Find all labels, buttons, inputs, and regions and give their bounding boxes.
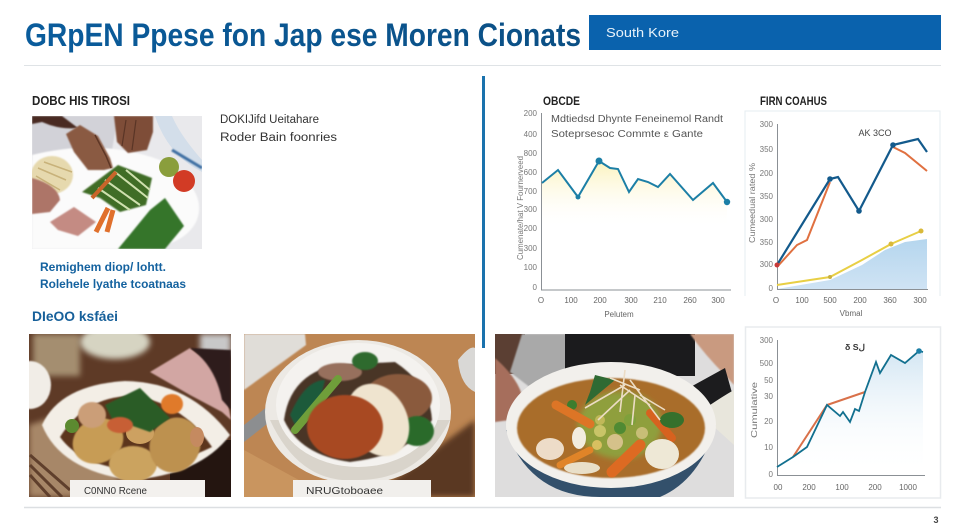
chart: line chart three: 0 (769, 470, 774, 479)
chart: line chart two: Vbmal (840, 309, 863, 318)
chart: line chart three: 50 (764, 376, 774, 385)
chart: line chart three: 30 (764, 392, 774, 401)
chart: line chart two: 100 (795, 296, 809, 305)
chart: line chart one: Pelutem (604, 310, 634, 319)
photo: chef plating food (31, 116, 202, 249)
chart: line chart three: 10 (764, 443, 774, 452)
chart: line chart one: 200 (593, 296, 607, 305)
chart: line chart two: 360 (883, 296, 897, 305)
photo: potato bowl (29, 334, 231, 497)
header banner (589, 15, 941, 50)
chart: line chart one: 200 (524, 109, 538, 118)
photo: vegetable stew bowl (495, 334, 734, 497)
chart: line chart two: 350 (760, 238, 774, 247)
header banner: South Kore (606, 26, 679, 40)
chart: line chart one: 0 (533, 283, 538, 292)
title: GRpEN Ppese fon Jap ese Moren Cionats (25, 17, 581, 53)
chart: line chart two: 300 (913, 296, 927, 305)
chart: line chart two: 300 (760, 120, 774, 129)
chart: line chart one: 300 (524, 244, 538, 253)
page number: 3 (933, 515, 939, 525)
plate (32, 148, 199, 249)
lime and tomato (159, 157, 179, 177)
caption: left dish: C0NN0 Rcene (84, 485, 147, 497)
chart: line chart one: 260 (683, 296, 697, 305)
chart: line chart three: Cumulative (750, 381, 759, 438)
chart: line chart one: Mdtiedsd Dhynte Feneinemol Randt (551, 114, 723, 125)
caption: middle dish: NRUGtoboaee (306, 485, 383, 497)
chart: line chart one: 800 (524, 149, 538, 158)
chart: line chart one: Cumenate/hat V Fournerveed (516, 156, 525, 260)
chart: line chart two: 300 (760, 215, 774, 224)
chart: line chart three: 200 (802, 483, 816, 492)
chart: line chart one: O (538, 296, 544, 305)
chart: line chart one: 300 (624, 296, 638, 305)
chart: line chart two: 350 (760, 145, 774, 154)
text: intro lines: Roder Bain foonries (220, 132, 337, 144)
chart: line chart one: 200 (524, 224, 538, 233)
chart: line chart three: 500 (760, 359, 774, 368)
chart: line chart two: FIRN COAHUS (760, 94, 827, 108)
chart: line chart two: 200 (853, 296, 867, 305)
chart: line chart three: 200 (868, 483, 882, 492)
chart: line chart three: 300 (760, 336, 774, 345)
chart: line chart two: 500 (823, 296, 837, 305)
chart: line chart three: 20 (764, 417, 774, 426)
meat (150, 348, 231, 420)
photo: meat and vegetable bowl (244, 334, 475, 497)
text: blue caption: Rolehele lyathe tcoatnaas (40, 277, 186, 291)
chart: line chart three: 100 (835, 483, 849, 492)
chart: line chart two: AK 3CO (858, 128, 892, 138)
bowl (265, 340, 451, 484)
glass and small bowls (33, 334, 80, 376)
text: intro lines (220, 114, 337, 144)
chart: line chart two: 200 (760, 169, 774, 178)
noodle garnish (585, 370, 665, 425)
caption: middle dish (293, 480, 431, 497)
chart: line chart one: 210 (653, 296, 667, 305)
chart: line chart one: 700 (524, 187, 538, 196)
heading: dish section: DIeOO ksfáei (32, 308, 118, 324)
text: blue caption: Remighem diop/ lohtt. (40, 260, 166, 274)
chart: line chart three: 00 (774, 483, 783, 492)
chart: line chart one: 100 (524, 263, 538, 272)
chart: line chart two: 350 (760, 192, 774, 201)
chart: line chart one: 100 (564, 296, 578, 305)
chart: line chart two: 0 (769, 284, 774, 293)
chart: line chart two: 300 (760, 260, 774, 269)
bowl contents (370, 373, 433, 419)
bowl (42, 381, 230, 480)
chart: line chart two: O (773, 296, 779, 305)
chart: line chart two (745, 94, 940, 318)
chart: line chart three (746, 327, 940, 498)
chart: line chart one: 300 (524, 205, 538, 214)
meat (32, 178, 60, 214)
chart: line chart one: 600 (524, 168, 538, 177)
chart: line chart one (516, 94, 731, 319)
vegetables (82, 165, 152, 212)
text: blue caption (40, 260, 186, 291)
chart: line chart three: 1000 (899, 483, 917, 492)
cabbage (31, 156, 73, 194)
chart: line chart three: δ Sل (845, 343, 865, 352)
vegetables (578, 391, 662, 459)
chart: line chart one: 300 (711, 296, 725, 305)
left hand and arm (32, 116, 78, 128)
napkin (244, 334, 306, 390)
chart: line chart one: OBCDE (543, 94, 580, 108)
chart: line chart two: Cumeedual rated % (748, 163, 757, 243)
caption: left dish (70, 480, 205, 497)
right hand (114, 116, 153, 153)
chart: line chart one: 400 (524, 130, 538, 139)
chart: line chart one: Soteprsesoc Commte ε Gante (551, 129, 703, 140)
vertical accent bar (482, 76, 485, 348)
text: intro lines: DOKIJifd Ueitahare (220, 114, 319, 126)
bowl body (506, 430, 706, 497)
heading: dish history: DOBC HIS TIROSI (32, 94, 130, 108)
shirt (32, 116, 116, 155)
